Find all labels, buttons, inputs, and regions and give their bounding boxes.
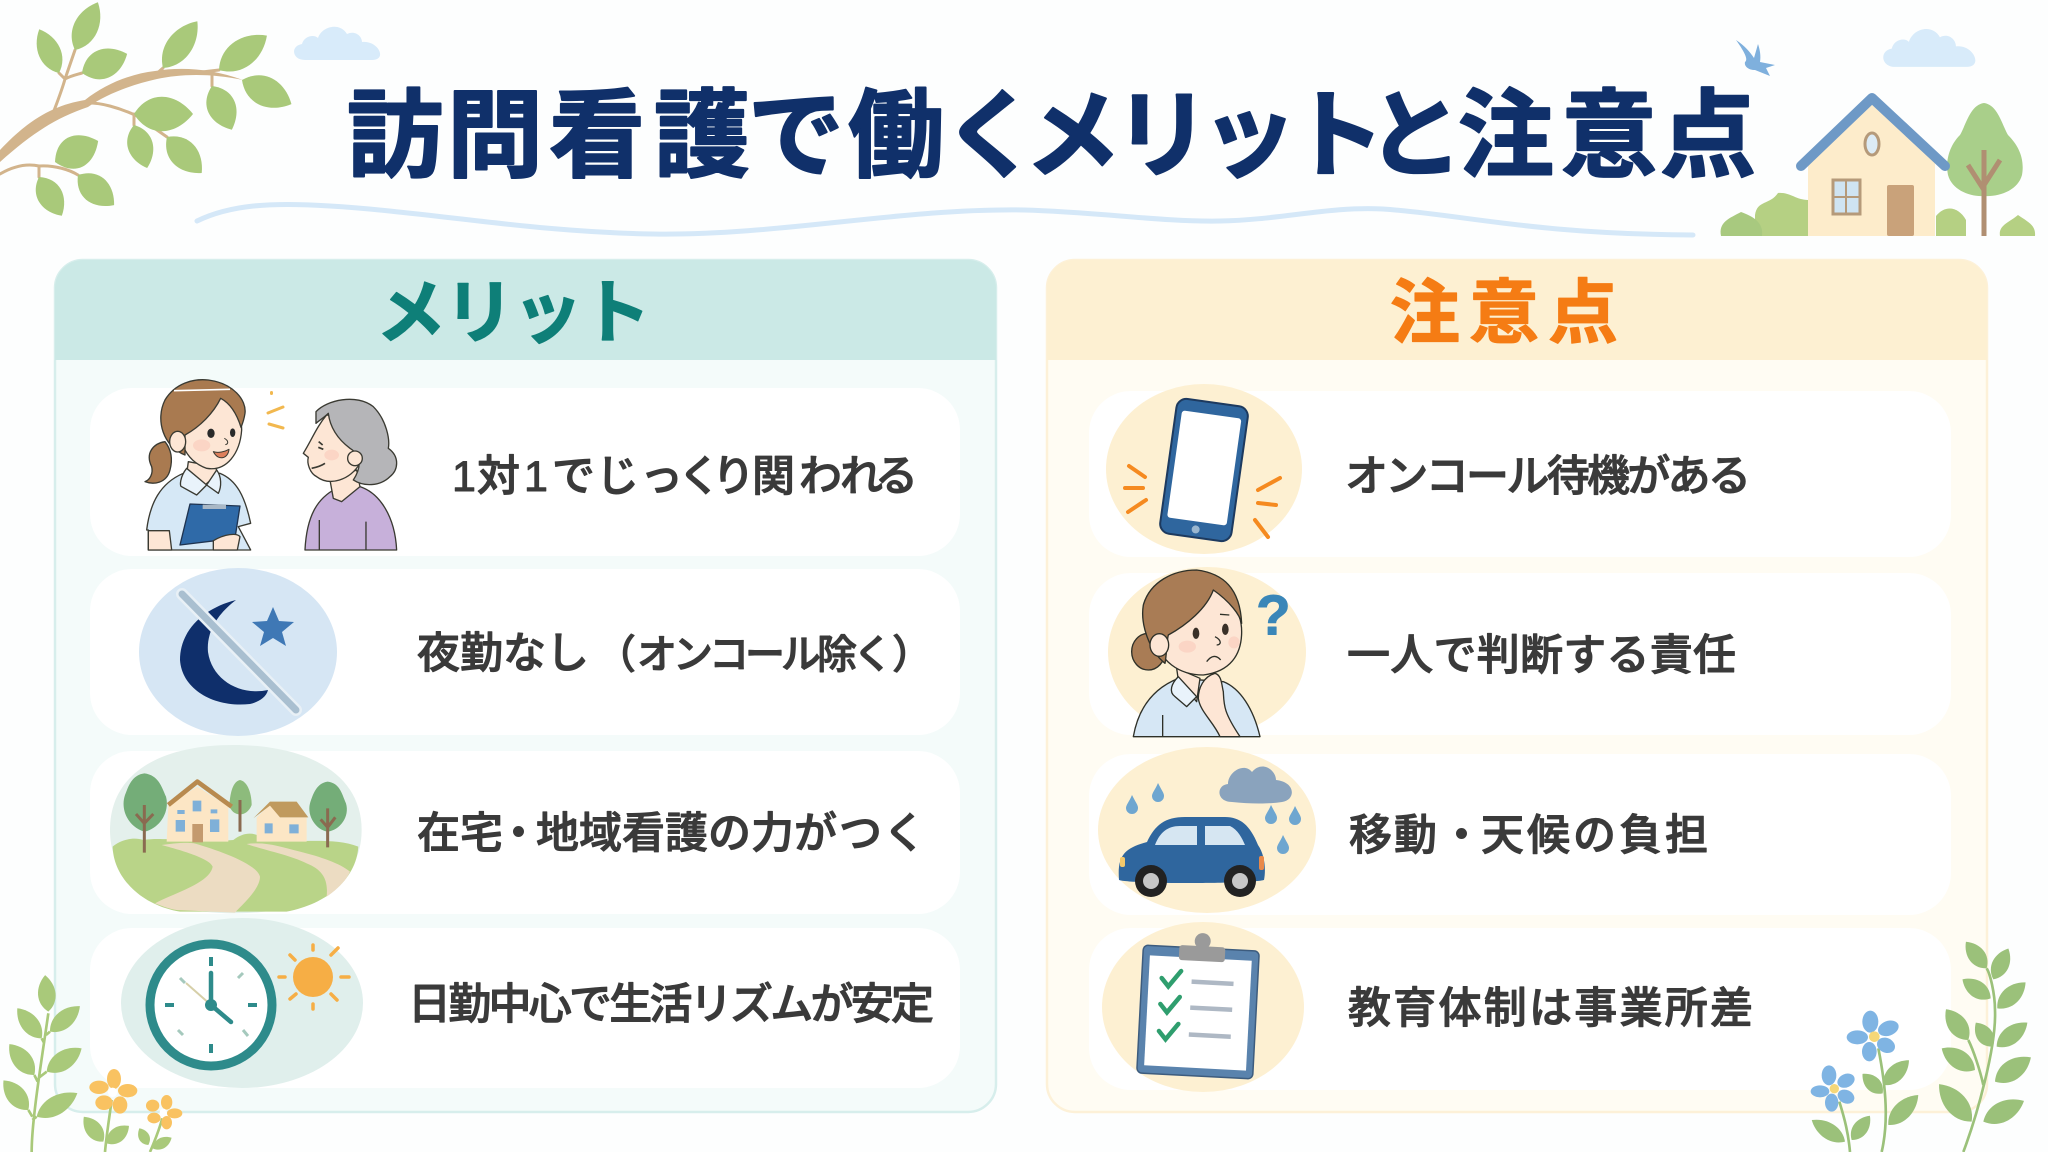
icon: checklist clipboard — [1102, 922, 1304, 1092]
panel body — [1047, 260, 1987, 1112]
icon: house with trees — [1721, 98, 2035, 236]
text: daytime rhythm: 日勤中心で生活リズムが安定 — [408, 981, 934, 1029]
icon: speech ticks — [268, 392, 283, 428]
text: travel and weather: 移動・天候の負担 — [1349, 812, 1708, 860]
icon: car in rain — [1098, 747, 1316, 913]
text: no night shift: 夜勤なし（オンコール除く） — [417, 630, 932, 678]
panel: cautions — [1047, 260, 1987, 1112]
title: 訪問看護で働くメリットと注意点 — [347, 83, 1756, 190]
row 3: travel and weather — [1089, 747, 1951, 915]
title wave underline — [197, 204, 1693, 235]
row 1: on-call — [1089, 384, 1951, 557]
row 4: education — [1089, 922, 1951, 1092]
text: community nursing: 在宅・地域看護の力がつく — [417, 810, 926, 858]
icon: thinking nurse — [1108, 567, 1306, 737]
icon: cloud left — [294, 27, 380, 60]
icon: ringing phone — [1106, 384, 1302, 554]
heading: メリット: メリット — [376, 274, 651, 352]
icon: bird — [1736, 40, 1775, 76]
panel header band — [1047, 260, 1987, 360]
icon: houses and paths — [110, 745, 362, 913]
icon: leafy branch — [0, 0, 298, 222]
text: responsibility: 一人で判断する責任 — [1347, 632, 1736, 680]
icon: cloud right — [1883, 29, 1975, 67]
panel: merits — [55, 260, 996, 1112]
text: education: 教育体制は事業所差 — [1348, 985, 1753, 1033]
text: on-call: オンコール待機がある — [1345, 453, 1751, 501]
icon: question mark: ? — [1256, 584, 1291, 647]
icon: nurse — [145, 380, 251, 550]
row 2: no night shift — [90, 568, 960, 736]
icon: elderly woman — [303, 399, 397, 550]
row 3: community nursing — [90, 745, 960, 914]
row 4: daytime rhythm — [90, 918, 960, 1088]
decoration: bottom-left plants and flowers — [0, 974, 182, 1152]
row 1: one-on-one — [90, 380, 960, 556]
row 2: responsibility — [1089, 567, 1951, 737]
text: one-on-one: 1対1でじっくり関われる — [452, 453, 918, 501]
icon: clock and sun — [121, 918, 363, 1088]
panel header band — [55, 260, 996, 360]
heading: 注意点: 注意点 — [1390, 274, 1618, 352]
panel body — [55, 260, 996, 1112]
decoration: bottom-right plants and flowers — [1807, 937, 2037, 1152]
icon: moon crossed out — [139, 568, 337, 736]
